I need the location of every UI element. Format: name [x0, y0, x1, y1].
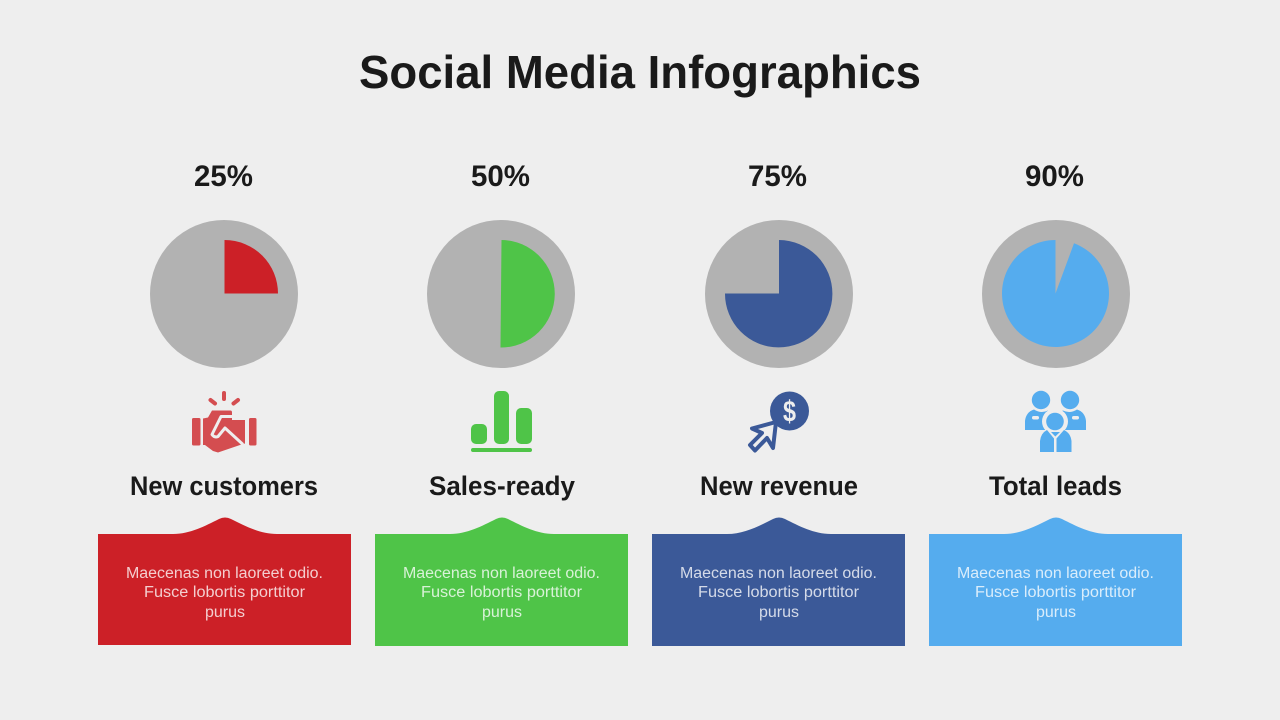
- panel: total leads: [929, 160, 1182, 646]
- icon: handshake: [192, 391, 256, 452]
- card text: Fusce lobortis porttitor: [144, 584, 305, 601]
- panel: new revenue: [652, 160, 905, 646]
- card text: [126, 565, 323, 621]
- card text: Maecenas non laoreet odio.: [957, 565, 1154, 582]
- callout card: [652, 518, 905, 646]
- icon: bar chart: [471, 391, 532, 452]
- card text: [957, 565, 1154, 621]
- percentage: 50%: 50%: [471, 160, 530, 193]
- card text: purus: [1036, 604, 1076, 621]
- callout card: [98, 518, 351, 645]
- label: Total leads: [989, 471, 1122, 501]
- pie chart: 25%: [150, 220, 298, 368]
- card text: purus: [482, 604, 522, 621]
- card text: Fusce lobortis porttitor: [421, 584, 582, 601]
- card text: purus: [205, 604, 245, 621]
- pie chart: 90%: [982, 220, 1130, 368]
- pie chart: 50%: [427, 220, 575, 368]
- icon: cursor and dollar: [750, 392, 809, 450]
- callout card: [929, 518, 1182, 646]
- icon: cursor and dollar: $: [783, 396, 796, 428]
- percentage: 90%: 90%: [1025, 160, 1084, 193]
- card text: [403, 565, 600, 621]
- card text: Fusce lobortis porttitor: [975, 584, 1136, 601]
- card text: Fusce lobortis porttitor: [698, 584, 859, 601]
- label: Sales-ready: [429, 471, 575, 501]
- card text: Maecenas non laoreet odio.: [126, 565, 323, 582]
- card text: Maecenas non laoreet odio.: [680, 565, 877, 582]
- label: New revenue: [700, 471, 858, 501]
- title: Social Media Infographics: [359, 46, 921, 98]
- card text: Maecenas non laoreet odio.: [403, 565, 600, 582]
- pie chart: 75%: [705, 220, 853, 368]
- card text: purus: [759, 604, 799, 621]
- icon: people group: [1025, 391, 1086, 452]
- card text: [680, 565, 877, 621]
- percentage: 25%: 25%: [194, 160, 253, 193]
- percentage: 75%: 75%: [748, 160, 807, 193]
- panel: new customers: [98, 160, 351, 645]
- panel: sales-ready: [375, 160, 628, 646]
- callout card: [375, 518, 628, 646]
- label: New customers: [130, 471, 318, 501]
